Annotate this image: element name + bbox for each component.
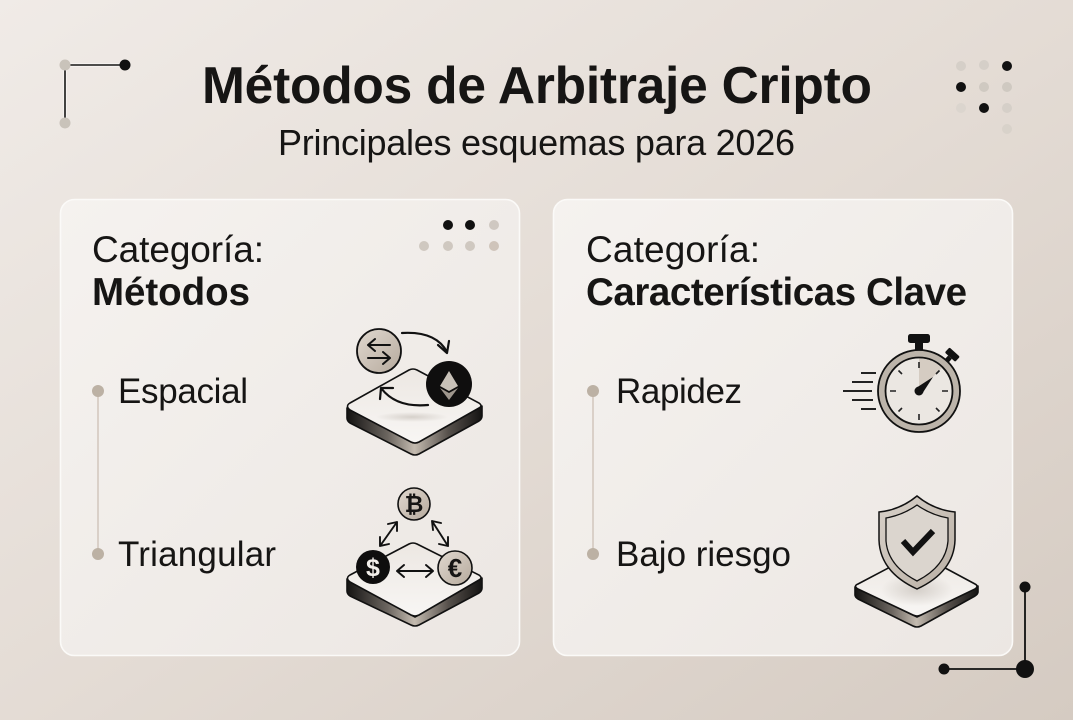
subtitle: Principales esquemas para 2026 — [278, 122, 795, 163]
icon: triangular arbitrage: ₿ — [405, 491, 423, 517]
decoration: top-right dot grid — [956, 60, 1012, 134]
icon: triangular arbitrage: $ — [366, 554, 380, 582]
panel heading: Métodos — [92, 271, 250, 314]
panel heading — [92, 229, 264, 314]
panel: métodos — [60, 200, 520, 656]
panel background — [554, 200, 1012, 656]
item: Bajo riesgo: Bajo riesgo — [616, 535, 791, 574]
icon: shield — [855, 496, 978, 627]
item: Triangular: Triangular — [118, 535, 276, 574]
panel: características clave — [554, 200, 1012, 656]
icon: spatial arbitrage — [347, 329, 482, 455]
item: Espacial: Espacial — [118, 372, 248, 411]
timeline connector — [587, 385, 599, 560]
icon: triangular arbitrage: € — [448, 553, 462, 583]
panel heading: Características Clave — [586, 271, 967, 314]
panel heading: Categoría: — [586, 229, 760, 270]
icon: triangular arbitrage — [347, 488, 482, 626]
item: Rapidez: Rapidez — [616, 372, 742, 411]
decoration: bottom-right corner bracket — [938, 582, 1034, 678]
decoration: top-left corner bracket — [60, 60, 130, 128]
timeline connector — [92, 385, 104, 560]
panel background — [60, 200, 520, 656]
panel dot grid — [419, 220, 499, 251]
title: Métodos de Arbitraje Cripto — [202, 56, 872, 114]
panel heading: Categoría: — [92, 229, 264, 270]
panel heading — [586, 229, 967, 314]
icon: stopwatch — [843, 334, 960, 432]
